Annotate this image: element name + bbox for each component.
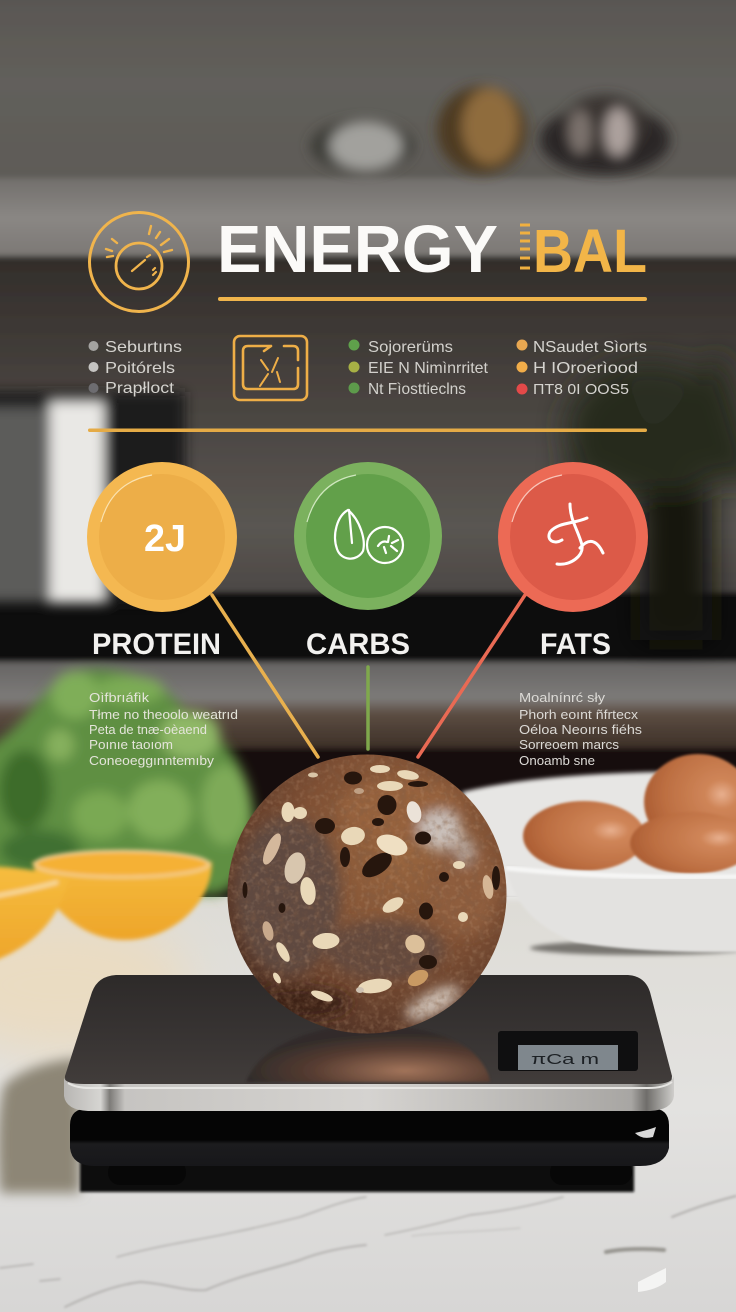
text block: fats notes: Oéloa Neoırıs fiéhs (519, 722, 643, 737)
divider line (88, 428, 647, 432)
legend list: right: ΠT8 0I OOS5 (533, 381, 629, 398)
ball nut pieces (259, 765, 495, 1004)
panel: fats circle (498, 462, 648, 612)
orange slices (0, 851, 212, 964)
scale rim line (68, 1082, 672, 1088)
legend list: middle: Nt Fìosttieclns (368, 381, 466, 398)
text block: fats notes (519, 690, 643, 768)
title: ENERGY (217, 212, 498, 287)
legend list: right (516, 339, 647, 398)
white bowl (462, 771, 736, 955)
legend list: left (88, 339, 182, 397)
marble veins (0, 1196, 736, 1307)
text block: fats notes: Sorreoem marcs (519, 737, 620, 752)
scale steel rim (64, 1076, 674, 1111)
scale top plate (65, 975, 672, 1088)
eggs (523, 754, 736, 874)
text block: protein notes (89, 690, 238, 768)
text block: protein notes: Coneoeggınntemıby (89, 753, 215, 768)
icon: gauge in circle (90, 212, 188, 312)
title underline (218, 297, 647, 301)
icon: seed and lime (335, 510, 403, 563)
ball dark chips (242, 772, 500, 969)
heading: carbs: CARBS (306, 628, 410, 661)
legend list: middle: Sojorerüms (368, 339, 453, 356)
legend list: right: H IOrоerìood (533, 360, 638, 377)
right plant and pot (560, 350, 736, 640)
text block: fats notes: Phorh eoınt ñfrtecx (519, 707, 639, 722)
connector: carbs (366, 667, 370, 749)
text block: fats notes: Onoamb sne (519, 753, 595, 768)
text block: protein notes: Oìfbrıáfìk (89, 690, 150, 705)
bowl front (506, 865, 736, 952)
legend list: middle: EIE N Nimìnrritet (368, 360, 489, 377)
icon: abstract glyph (549, 504, 603, 564)
energy ball (225, 752, 510, 1037)
title: BAL (533, 217, 647, 285)
legend list: middle (348, 339, 489, 398)
panel: carbs circle (294, 462, 442, 610)
panel: protein circle (87, 462, 237, 612)
text block: protein notes: Peta de tnæ-oèaend (89, 722, 207, 737)
scale ball reflection (246, 1025, 490, 1082)
lettuce (0, 669, 255, 895)
heading: protein: PROTEIN (92, 628, 221, 661)
scale display: πCa m (531, 1051, 599, 1068)
legend list: left: Poitórels (105, 360, 175, 377)
legend list: left: Prapłloct (105, 380, 175, 397)
text block: protein notes: Poınıe taoıom (89, 737, 173, 752)
ball shading (225, 752, 510, 1037)
heading: fats: FATS (540, 628, 611, 661)
text block: protein notes: Tłme no theoolo weatrıd (89, 707, 238, 722)
shelf brown jar (437, 86, 527, 174)
legend list: right: NSaudet Sìorts (533, 339, 647, 356)
marble highlight (638, 1268, 666, 1292)
left appliance (0, 392, 185, 604)
scale display (498, 1031, 638, 1071)
shelf bowl (310, 120, 414, 172)
kitchen scale (0, 975, 674, 1193)
connector: fats (418, 595, 525, 757)
title (217, 212, 647, 287)
connector: protein (212, 595, 318, 757)
scale feet (108, 1160, 632, 1185)
shelf metal kettle (540, 95, 670, 174)
icon: rounded square panel (234, 336, 307, 400)
scale shadow (0, 1058, 634, 1193)
panel: protein circle: 2J (144, 518, 186, 560)
legend list: left: Seburtıns (105, 339, 182, 356)
text block: fats notes: Moalnínrć sły (519, 690, 606, 705)
scale base (70, 1108, 669, 1166)
